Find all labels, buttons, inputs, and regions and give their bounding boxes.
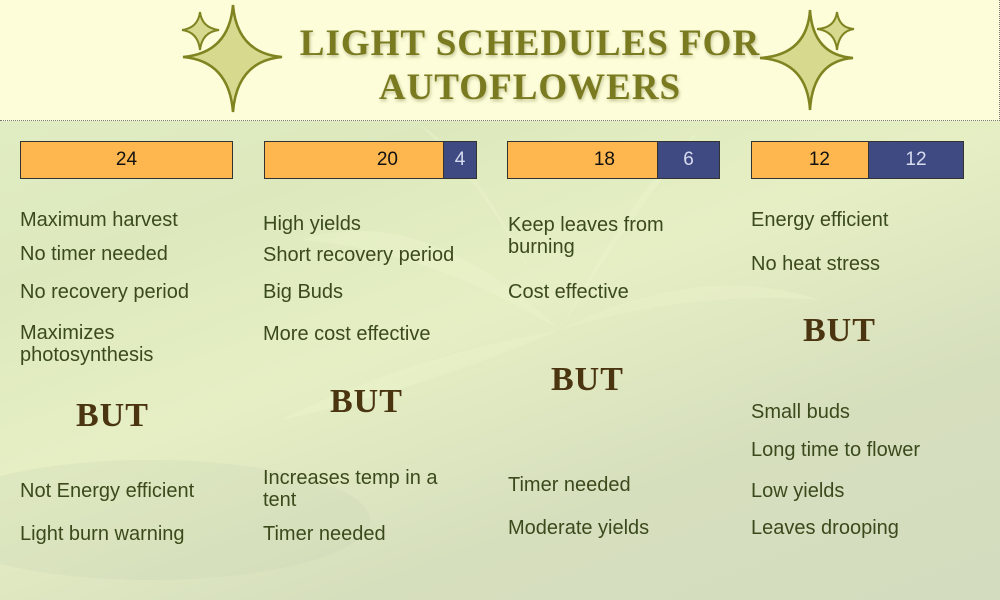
icon: right sparkles: [760, 10, 854, 110]
background leaf shapes: [0, 120, 1000, 600]
column 2 text: High yields: [263, 213, 361, 235]
column 4 text: Leaves drooping: [751, 517, 899, 539]
bar: 12/12: [751, 141, 964, 179]
column 3 text: Moderate yields: [508, 517, 649, 539]
bar: 12/12: 12: [905, 149, 927, 170]
column 3 text: burning: [508, 236, 575, 258]
bar: 18/6: [507, 141, 720, 179]
column 2 text: [263, 213, 454, 545]
icon: left sparkles: [182, 4, 282, 112]
column 1 text: Maximizes: [20, 322, 114, 344]
bar: 20/4: 20: [377, 149, 398, 170]
column 2 text: BUT: [330, 383, 403, 420]
column 3 text: Cost effective: [508, 281, 629, 303]
column 1 text: No timer needed: [20, 243, 168, 265]
column 2 text: More cost effective: [263, 323, 430, 345]
column 1 text: Not Energy efficient: [20, 480, 194, 502]
header: [0, 0, 1000, 121]
bar: 20/4: [264, 141, 477, 179]
column 1 text: No recovery period: [20, 281, 189, 303]
column 1 text: Maximum harvest: [20, 209, 178, 231]
column 3 text: [508, 214, 664, 539]
column 1 text: photosynthesis: [20, 344, 153, 366]
column 3 text: Keep leaves from: [508, 214, 664, 236]
bar: 24: 24: [116, 149, 137, 170]
column 3 text: Timer needed: [508, 474, 631, 496]
column 4 text: BUT: [803, 312, 876, 349]
column 4 text: Low yields: [751, 480, 844, 502]
column 4 text: Small buds: [751, 401, 850, 423]
column 2 text: tent: [263, 489, 296, 511]
title: LIGHT SCHEDULES FOR: [300, 23, 760, 64]
column 2 text: Increases temp in a: [263, 467, 438, 489]
title: AUTOFLOWERS: [379, 67, 681, 108]
bar: 18/6: 18: [594, 149, 615, 170]
column 1 text: Light burn warning: [20, 523, 185, 545]
column 1 text: [20, 209, 194, 545]
column 1 text: BUT: [76, 397, 149, 434]
bar: 18/6: 6: [683, 149, 694, 170]
column 4 text: Long time to flower: [751, 439, 920, 461]
column 2 text: Big Buds: [263, 281, 343, 303]
column 2 text: Timer needed: [263, 523, 386, 545]
column 3 text: BUT: [551, 361, 624, 398]
bar: 24: [20, 141, 233, 179]
bar: 12/12: 12: [809, 149, 830, 170]
column 4 text: No heat stress: [751, 253, 880, 275]
column 4 text: Energy efficient: [751, 209, 888, 231]
title: [300, 23, 762, 108]
bar: 20/4: 4: [455, 149, 465, 170]
column 4 text: [751, 209, 920, 539]
column 2 text: Short recovery period: [263, 244, 454, 266]
